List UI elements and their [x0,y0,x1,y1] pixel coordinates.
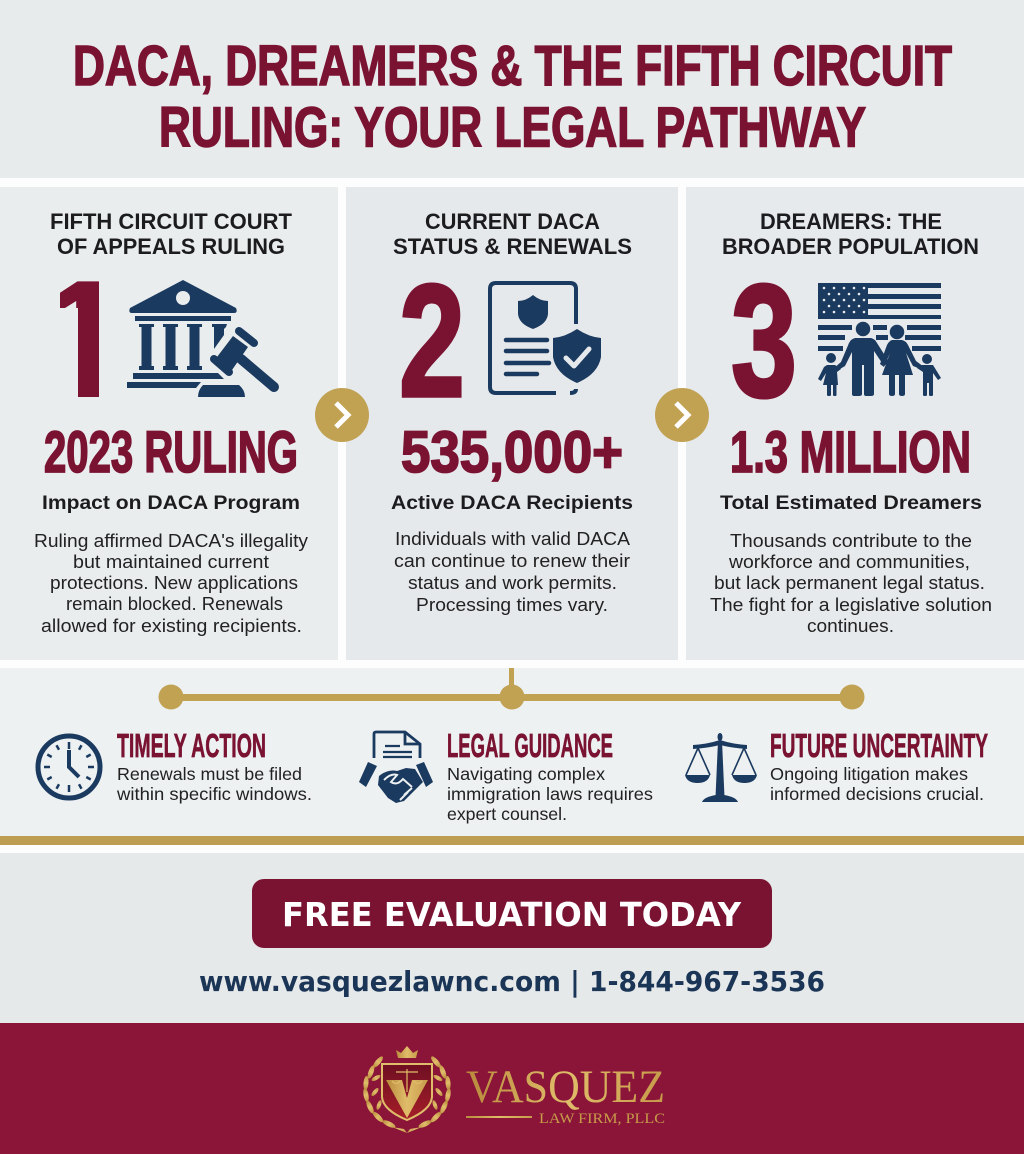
crown [396,1046,418,1058]
item: timely action [116,727,312,804]
panel 2: current DACA status [346,187,678,660]
big stat 535,000+: 535,000+ [401,420,623,485]
panel 3: Dreamers [686,187,1024,660]
body text: but lack permanent legal status. [714,572,985,593]
item: legal guidance [447,727,653,824]
panel 3 heading: BROADER POPULATION [722,234,979,259]
item: legal guidance: expert counsel. [447,804,567,824]
body text: Processing times vary. [416,594,608,615]
item: timely action: Renewals must be filed [117,764,302,784]
item: legal guidance: LEGAL GUIDANCE [447,727,613,764]
icon: document with shield [490,283,601,393]
scale [392,1069,422,1092]
body text: continues. [807,615,894,636]
body text: workforce and communities, [728,551,970,572]
logo: wordmark: LAW FIRM, PLLC [539,1111,665,1127]
icon: courthouse and gavel [127,280,274,397]
subheading: Total Estimated Dreamers [720,492,982,514]
call to action section [0,853,1024,1023]
body text: but maintained current [73,551,269,572]
number 1: 1 [37,245,130,433]
item: future uncertainty [770,727,988,804]
logo: wordmark: VASQUEZ [466,1061,665,1113]
body text: status and work permits. [408,572,617,593]
panel 2 heading: CURRENT DACA [425,209,600,234]
panel 2 heading [393,209,632,259]
laurel right [407,1055,452,1133]
body text [710,530,992,636]
timeline connector [158,668,864,710]
button: free evaluation: FREE EVALUATION TODAY [282,895,742,934]
panel 1 heading: OF APPEALS RULING [57,234,285,259]
arrow: panel 1 to panel 2 [315,388,369,442]
panel 1 heading [50,209,292,259]
logo: crest [362,1046,452,1133]
body text: Ruling affirmed DACA's illegality [34,530,309,551]
item: future uncertainty: Ongoing litigation makes [770,764,968,784]
panel 3 heading: DREAMERS: THE [760,209,942,234]
icon: clock [38,736,100,798]
body text: The fight for a legislative solution [710,594,992,615]
contact line: www.vasquezlawnc.com | 1-844-967-3536 [199,965,825,998]
body text: protections. New applications [50,572,298,593]
item: legal guidance: immigration laws requires [447,784,653,804]
subheading: Active DACA Recipients [391,492,633,514]
panel 1 heading: FIFTH CIRCUIT COURT [50,209,292,234]
header: title band [0,0,1024,178]
icon: scales of justice [685,733,757,802]
item: legal guidance: Navigating complex [447,764,605,784]
item: future uncertainty: informed decisions crucial. [770,784,984,804]
strip: key considerations [0,668,1024,836]
item: timely action: TIMELY ACTION [117,727,266,764]
body text: allowed for existing recipients. [41,615,302,636]
gold divider [0,836,1024,845]
panel 1: Fifth Circuit ruling [0,187,338,660]
body text [34,530,309,636]
button: free evaluation [252,879,772,948]
body text: Thousands contribute to the [730,530,972,551]
body text: Individuals with valid DACA [395,528,631,549]
panel 2 heading: STATUS & RENEWALS [393,234,632,259]
arrow: panel 2 to panel 3 [655,388,709,442]
laurel left [362,1055,407,1133]
body text: can continue to renew their [394,550,630,571]
big stat 2023 ruling: 2023 RULING [44,420,298,485]
body text [394,528,631,615]
body text: remain blocked. Renewals [66,593,283,614]
chevron V [386,1080,428,1118]
panel 3 heading [722,209,979,259]
number 2: 2 [399,251,465,430]
icon: flag and family [818,283,941,396]
number 3: 3 [731,251,797,430]
footer band [0,1023,1024,1154]
subheading: Impact on DACA Program [42,492,300,514]
shield [382,1064,432,1120]
item: timely action: within specific windows. [116,784,312,804]
icon: document and handshake [359,732,433,803]
